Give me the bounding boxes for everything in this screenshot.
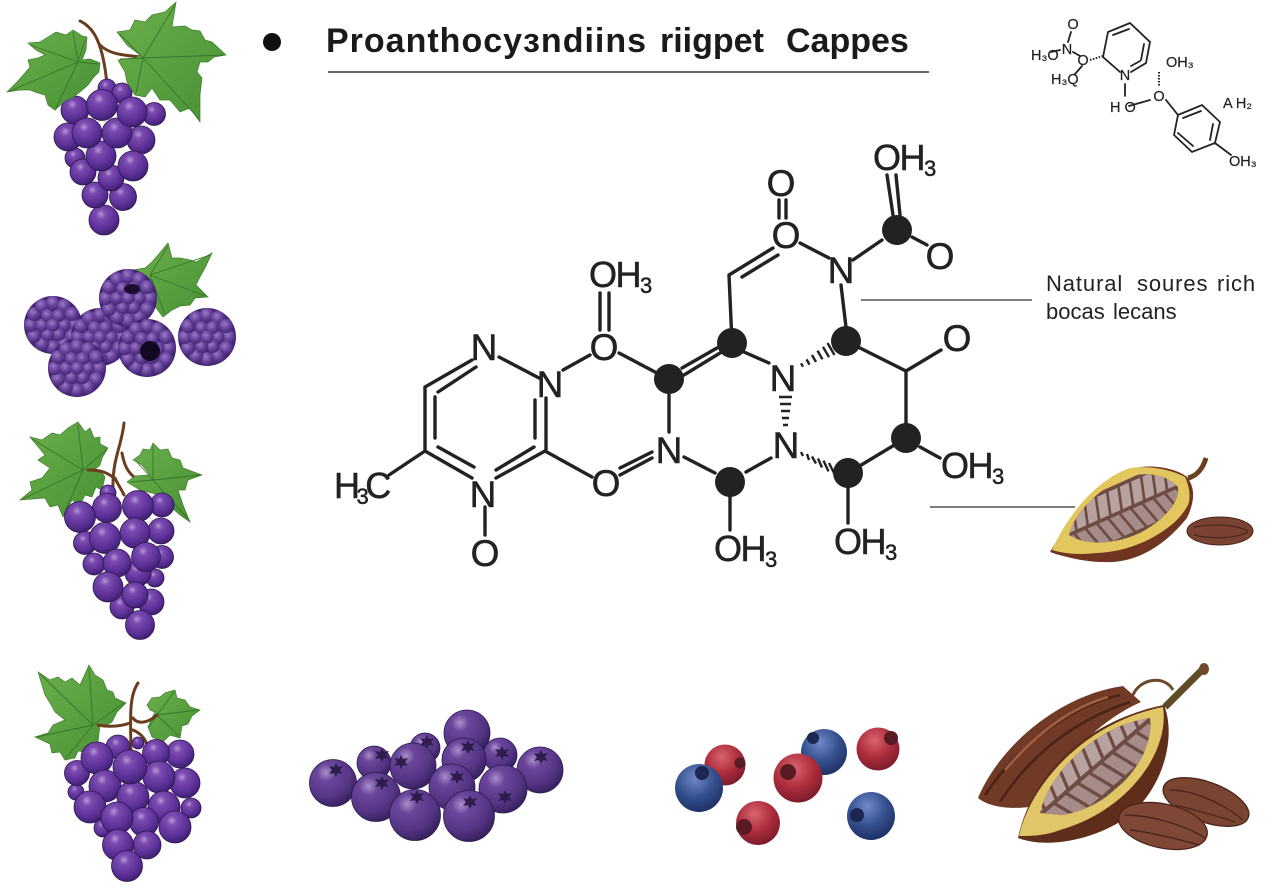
chemical structure: small molecule: N (1062, 42, 1072, 58)
chemical structure: small molecule: OH₃ (1229, 154, 1257, 170)
chemical structure: small molecule (1031, 17, 1257, 170)
chemical structure: main molecule: O (592, 463, 620, 504)
callout label: Natural (1046, 271, 1123, 296)
icon: grape cluster 1 (7, 2, 226, 235)
chemical structure: main molecule: O (772, 215, 800, 256)
title underline (328, 71, 929, 73)
chemical structure: small molecule: A H₂ (1223, 96, 1252, 112)
icon: cocoa bean (1187, 517, 1253, 545)
chemical structure: main molecule: 3 (356, 484, 368, 509)
title: Cappes (786, 22, 909, 60)
chemical structure: main molecule: C (365, 465, 390, 506)
icon: grape cluster 2 (20, 422, 202, 640)
callout label: soures (1137, 271, 1208, 296)
chemical structure: main molecule: N (656, 430, 682, 471)
chemical structure: main molecule: N (470, 474, 496, 515)
chemical structure: main molecule: O (471, 533, 499, 574)
chemical structure: small molecule: O (1067, 17, 1079, 33)
chemical structure: main molecule: N (773, 425, 799, 466)
icon: blackberries (24, 243, 236, 397)
leader line to cocoa (930, 506, 1075, 508)
title: Proanthocyзndiins (326, 22, 647, 60)
chemical structure: small molecule: H O (1110, 100, 1136, 116)
chemical structure: main molecule: 3 (924, 156, 936, 181)
chemical structure: small molecule: H₃Q (1051, 72, 1079, 88)
callout label: bocas (1046, 299, 1105, 324)
atom labels: N (471, 327, 497, 368)
chemical structure: main molecule: O (767, 163, 795, 204)
hashed bonds (779, 343, 835, 475)
chemical structure: main molecule: 3 (885, 540, 897, 565)
callout label: lecans (1113, 299, 1177, 324)
callout label: rich (1217, 271, 1256, 296)
chemical structure: main molecule: O (926, 236, 954, 277)
icon: large cocoa pods (978, 663, 1255, 857)
chemical structure: main molecule: N (828, 250, 854, 291)
icon: mixed blue and red berries (675, 728, 900, 845)
chemical structure: main molecule (334, 137, 1004, 574)
chemical structure: main molecule: OH (941, 445, 992, 486)
chemical structure: small molecule: O (1153, 89, 1165, 105)
chemical structure: main molecule: O (943, 318, 971, 359)
title bullet (263, 33, 281, 51)
callout label (1046, 271, 1256, 324)
chemical structure: main molecule: N (537, 364, 563, 405)
chemical structure: small molecule: H₃O (1031, 48, 1059, 64)
chemical structure: main molecule: OH (589, 254, 640, 295)
chemical structure: main molecule: 3 (992, 464, 1004, 489)
icon: grape cluster 3 (35, 665, 201, 882)
title: riigpet (660, 22, 764, 60)
carbon atoms (654, 215, 921, 497)
chemical structure: main molecule: OH (834, 521, 885, 562)
chemical structure: main molecule: OH (714, 528, 765, 569)
chemical structure: main molecule: 3 (640, 273, 652, 298)
chemical structure: small molecule: OH₃ (1166, 55, 1194, 71)
icon: purple berries (310, 710, 563, 842)
icon: small cocoa pod half (1050, 458, 1206, 562)
chemical structure: small molecule: N (1120, 68, 1130, 84)
chemical structure: main molecule: N (770, 358, 796, 399)
chemical structure: main molecule: O (590, 327, 618, 368)
bonds (389, 175, 941, 535)
leader line to label (861, 299, 1032, 301)
chemical structure: small molecule: O (1077, 53, 1089, 69)
chemical structure: main molecule: 3 (765, 547, 777, 572)
chemical structure: main molecule: H (334, 465, 356, 506)
chemical structure: main molecule: OH (873, 137, 924, 178)
